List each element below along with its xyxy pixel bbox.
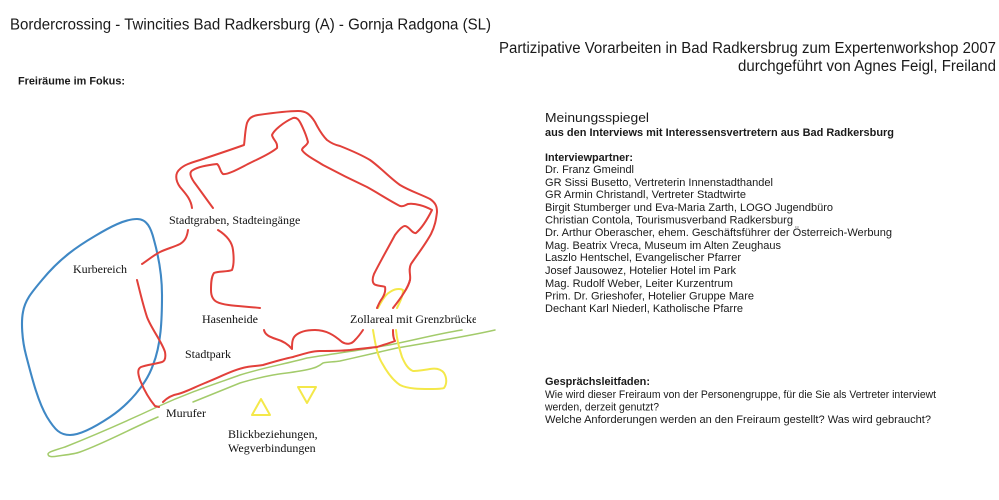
- text block: Interviewpartner: Dr. Franz Gmeindl: [545, 164, 634, 176]
- text block: Interviewpartner: Dechant Karl Niederl, Katholische Pfarre: [545, 303, 743, 315]
- label: Kurbereich: Kurbereich: [73, 262, 127, 276]
- path: Mur riverbank green lines: [48, 330, 495, 457]
- text block: Interviewpartner: GR Sissi Busetto, Vertreterin Innenstadthandel: [545, 177, 773, 189]
- main title: Bordercrossing - Twincities Bad Radkersburg (A) - Gornja Radgona (SL): [10, 16, 491, 34]
- subtitle: [499, 40, 996, 75]
- marker: view triangles: [252, 387, 316, 415]
- label: Blickbeziehungen: Blickbeziehungen,: [228, 427, 318, 441]
- label: Stadtgraben: Stadtgraben, Stadteingänge: [169, 213, 300, 227]
- hand-drawn map sketch: [22, 111, 495, 457]
- text block: Gesprächsleitfaden: werden, derzeit genutzt?: [544, 402, 659, 414]
- map labels: [73, 213, 477, 455]
- text block: Gesprächsleitfaden: Wie wird dieser Freiraum von der Personengruppe, für die Sie als Vertreter interviewt: [545, 389, 936, 401]
- text block: Interviewpartner: Mag. Rudolf Weber, Leiter Kurzentrum: [545, 278, 733, 290]
- heading: Meinungsspiegel: [545, 110, 894, 139]
- text block: Interviewpartner: Josef Jausowez, Hotelier Hotel im Park: [545, 265, 737, 277]
- text block: Interviewpartner: Mag. Beatrix Vreca, Museum im Alten Zeughaus: [545, 240, 782, 252]
- text block: Gesprächsleitfaden: [544, 376, 936, 426]
- heading: Meinungsspiegel: Meinungsspiegel: [545, 110, 649, 125]
- text block: Interviewpartner: Prim. Dr. Grieshofer, Hotelier Gruppe Mare: [545, 290, 754, 302]
- text block: Interviewpartner: Dr. Arthur Oberascher, ehem. Geschäftsführer der Österreich-Werbung: [545, 227, 892, 239]
- subtitle: Partizipative Vorarbeiten in Bad Radkersbrug zum Expertenworkshop 2007: [499, 40, 996, 57]
- label: Blickbeziehungen: Wegverbindungen: [228, 441, 316, 455]
- text block: Interviewpartner: Interviewpartner:: [545, 152, 633, 164]
- subtitle: durchgeführt von Agnes Feigl, Freiland: [738, 58, 996, 75]
- area: Kurbereich blue outline: [22, 219, 162, 435]
- label: Zollareal: Zollareal mit Grenzbrücke: [350, 312, 477, 326]
- label: Blickbeziehungen: [228, 427, 318, 455]
- text block: Interviewpartner: Birgit Stumberger und Eva-Maria Zarth, LOGO Jugendbüro: [545, 202, 833, 214]
- heading: Meinungsspiegel: aus den Interviews mit Interessensvertretern aus Bad Radkersburg: [545, 127, 894, 139]
- label: Stadtpark: Stadtpark: [185, 347, 231, 361]
- text block: Interviewpartner: GR Armin Christandl, Vertreter Stadtwirte: [545, 189, 746, 201]
- text block: Interviewpartner: Laszlo Hentschel, Evangelischer Pfarrer: [545, 252, 741, 264]
- label: Murufer: Murufer: [166, 406, 206, 420]
- text block: Gesprächsleitfaden: Welche Anforderungen werden an den Freiraum gestellt? Was wird gebraucht?: [545, 414, 931, 426]
- heading: Freiräume im Fokus: Freiräume im Fokus:: [18, 76, 125, 88]
- label: Hasenheide: Hasenheide: [202, 312, 258, 326]
- text block: Interviewpartner: [545, 152, 892, 315]
- area: Stadtgraben red outline: [137, 111, 437, 407]
- text block: Gesprächsleitfaden: Gesprächsleitfaden:: [545, 376, 650, 388]
- area: Zollareal yellow outline: [373, 289, 446, 389]
- text block: Interviewpartner: Christian Contola, Tourismusverband Radkersburg: [545, 214, 793, 226]
